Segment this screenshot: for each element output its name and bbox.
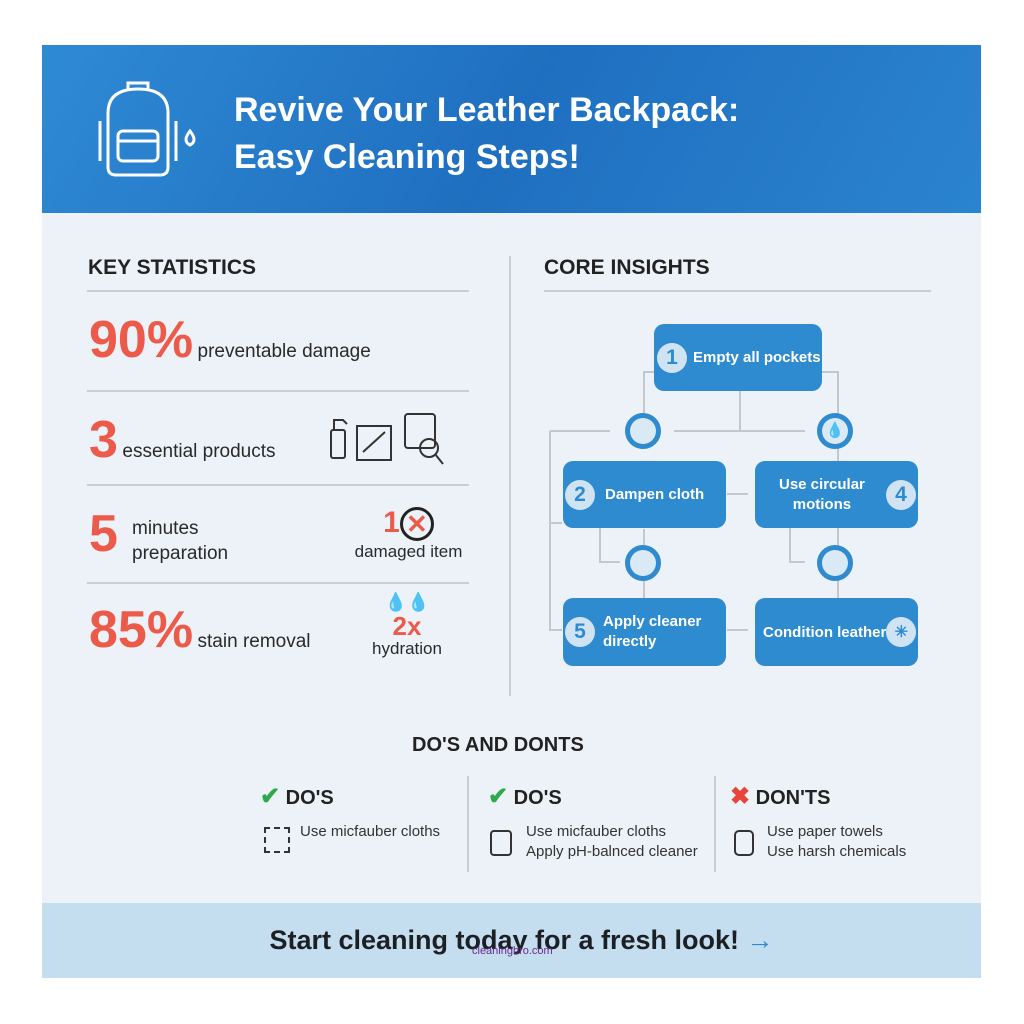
column: dos 2: ✔ DO'S xyxy=(488,783,562,810)
step 2: 2 xyxy=(574,482,586,506)
icon: hydration: 💧💧 xyxy=(385,592,429,612)
icon: circle drop: 💧 xyxy=(826,422,844,439)
icon: damaged item: damaged item xyxy=(355,542,462,561)
stat 5: minutes xyxy=(132,518,199,539)
step 6 xyxy=(755,598,918,666)
icon: backpack xyxy=(98,82,196,176)
title: Easy Cleaning Steps! xyxy=(234,138,580,176)
column: dos 1 xyxy=(260,783,440,853)
icon: circle skull xyxy=(817,545,853,581)
column: dos 2: Apply pH-balnced cleaner xyxy=(526,843,698,860)
step 4 xyxy=(755,461,918,528)
step 6: ✳ xyxy=(895,624,908,641)
step 6: Condition leather xyxy=(763,624,886,640)
column: dos 1: ✔ DO'S xyxy=(260,783,334,810)
column: donts: Use harsh chemicals xyxy=(767,843,906,860)
footer banner xyxy=(42,903,981,978)
icon: damaged item: 1 xyxy=(383,506,400,539)
stat 90%: 90% preventable damage xyxy=(89,311,371,369)
step 2 xyxy=(563,461,726,528)
column: dos 2: Use micfauber cloths xyxy=(526,823,666,840)
flowchart connectors xyxy=(549,371,839,631)
column: donts xyxy=(730,783,906,860)
step 2: Dampen cloth xyxy=(605,486,704,503)
icon: hydration: hydration xyxy=(372,639,442,658)
title: Revive Your Leather Backpack: xyxy=(234,91,739,129)
step 1: Empty all pockets xyxy=(693,349,821,366)
icon: circle refresh xyxy=(625,545,661,581)
footer banner: cleaningbro.com xyxy=(472,945,553,957)
stat 3: 3 essential products xyxy=(89,411,276,469)
icon: damaged item xyxy=(355,506,462,561)
column: donts: ✖ DON'TS xyxy=(730,783,830,810)
icon: hydration: 2x xyxy=(393,611,421,641)
heading: CORE INSIGHTS xyxy=(544,256,710,279)
icon: products xyxy=(330,413,444,465)
icon: circle backpack xyxy=(625,413,661,449)
step 4: 4 xyxy=(895,482,907,506)
column: dos 2 xyxy=(488,783,698,860)
step 5 xyxy=(563,598,726,666)
column: dos 1: Use micfauber cloths xyxy=(300,823,440,840)
step 1 xyxy=(654,324,822,391)
step 5: Apply cleaner xyxy=(603,613,701,630)
step 1: 1 xyxy=(666,346,678,368)
step 5: directly xyxy=(603,633,656,650)
step 4: Use circular xyxy=(779,476,865,492)
icon: circle drop xyxy=(817,413,853,449)
panel: key statistics xyxy=(87,256,469,659)
title xyxy=(234,91,739,176)
heading: KEY STATISTICS xyxy=(88,256,256,279)
stat 5 xyxy=(89,505,228,564)
icon: damaged item: ✕ xyxy=(406,509,428,539)
step 4: motions xyxy=(793,496,851,512)
icon: hydration xyxy=(372,592,442,658)
column: donts: Use paper towels xyxy=(767,823,883,840)
stat 5: preparation xyxy=(132,543,228,564)
stat 85%: 85% stain removal xyxy=(89,601,311,659)
stat 5: 5 xyxy=(89,505,118,563)
header banner xyxy=(42,45,981,213)
step 5: 5 xyxy=(574,620,586,643)
heading: dos and donts: DO'S AND DONTS xyxy=(412,734,584,756)
footer banner: Start cleaning today for a fresh look! → xyxy=(269,925,774,955)
